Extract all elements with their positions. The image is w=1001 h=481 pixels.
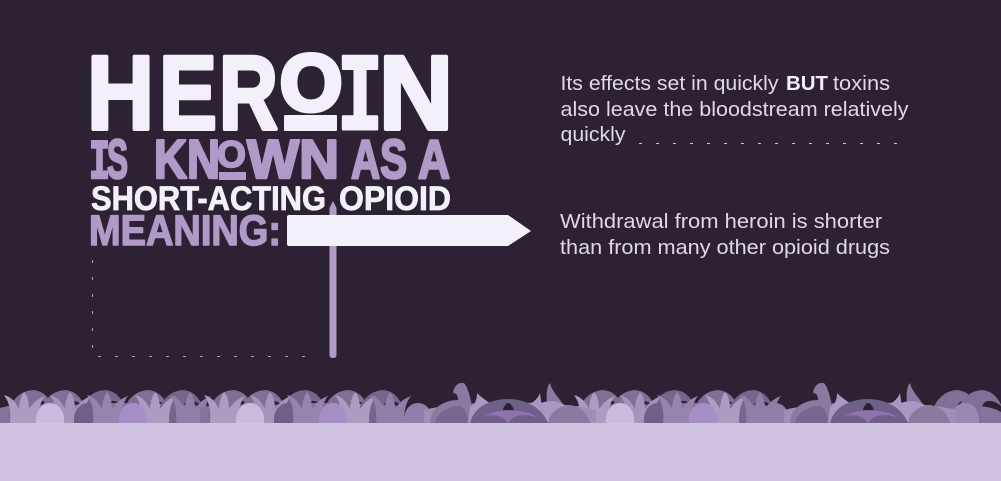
heading line: IS KNOWN AS A: AS [351, 128, 407, 190]
text block: effects: toxins [833, 72, 890, 95]
heading line: IS KNOWN AS A [89, 128, 450, 195]
text block: effects: Its effects set in quickly [560, 72, 779, 95]
text block: effects [560, 72, 909, 146]
heading line: IS KNOWN AS A: O [217, 134, 246, 175]
text block: effects: also leave the bloodstream relatively [560, 98, 909, 121]
title: HEROIN: R [219, 35, 278, 152]
signpost pole [330, 201, 336, 358]
text block: withdrawal: Withdrawal from heroin is shorter [560, 210, 882, 233]
heading line: IS KNOWN AS A: I [89, 131, 110, 195]
dashed connector: post to heading [92, 260, 307, 356]
title: HEROIN: H [87, 35, 154, 152]
title: HEROIN: O [280, 38, 342, 127]
signpost arrow board [287, 215, 531, 246]
dashed connector: effects [639, 142, 900, 144]
heading line: IS KNOWN AS A: WN [247, 128, 339, 190]
text block: effects: quickly [560, 123, 626, 146]
title: HEROIN: E [159, 35, 217, 152]
ground band [0, 423, 1001, 481]
text block: withdrawal [560, 210, 890, 259]
text block: withdrawal: than from many other opioid drugs [560, 236, 890, 259]
grass border [0, 383, 1001, 423]
heading line: IS KNOWN AS A: S [107, 128, 128, 190]
title: HEROIN: I [337, 38, 383, 163]
text block: effects: BUT [786, 72, 828, 95]
title: HEROIN: N [379, 35, 453, 152]
heading line: MEANING:: MEANING: [89, 207, 281, 255]
heading line: IS KNOWN AS A: KN [154, 128, 220, 190]
heading line: SHORT-ACTING OPIOID: OPIOID [339, 180, 451, 218]
heading line: SHORT-ACTING OPIOID: SHORT-ACTING [91, 180, 326, 218]
heading line: IS KNOWN AS A: A [418, 128, 450, 190]
title: HEROIN [87, 35, 453, 163]
